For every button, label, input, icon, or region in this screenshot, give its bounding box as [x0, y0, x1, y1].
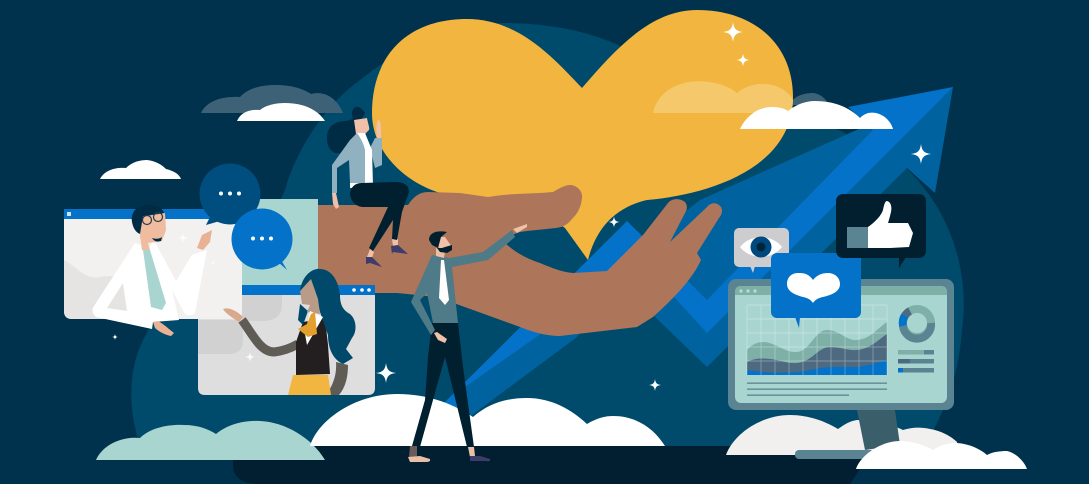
person: woman in window: [223, 269, 356, 395]
raised hand: [376, 120, 381, 138]
beard: [152, 237, 162, 242]
torso and arms: [411, 230, 515, 335]
window: front: [64, 209, 242, 319]
hair: [298, 269, 356, 364]
lower hand: [332, 193, 339, 209]
cloud: centre white: [310, 394, 665, 446]
near arm: [242, 320, 298, 352]
jacket: [296, 318, 330, 375]
person: man in window: [92, 205, 212, 336]
area chart: [747, 305, 887, 375]
sparkle stars: [112, 22, 931, 391]
cloud: right light grey: [726, 415, 960, 455]
thumbs up bubble: [836, 194, 926, 268]
beard: [437, 245, 452, 253]
legs: [350, 182, 409, 251]
window: back: [198, 285, 375, 395]
growth arrow: [440, 87, 953, 420]
cloud: top left grey: [201, 85, 343, 113]
skirt: [288, 375, 331, 395]
scarf: [298, 312, 317, 337]
speech bubble: dark: [200, 164, 260, 225]
teal panel: [238, 199, 318, 294]
face: [300, 279, 320, 314]
face: [354, 118, 369, 138]
background blob: [131, 23, 964, 446]
person: standing man: [408, 224, 527, 462]
blouse: [350, 133, 373, 188]
forearm: [370, 138, 382, 168]
shoes: [366, 257, 382, 267]
face: [438, 237, 452, 253]
hand: [318, 185, 722, 336]
heart: [372, 10, 793, 260]
cloud: top right white: [740, 101, 893, 129]
cloud: grey behind arrow: [790, 93, 829, 105]
donut chart: [903, 309, 931, 339]
hair: [429, 231, 447, 248]
cloud: bottom left teal: [96, 421, 325, 460]
heart cloud highlight: [653, 81, 793, 113]
ground band: [233, 446, 875, 484]
monitor: [728, 279, 954, 410]
progress bars: [898, 350, 934, 372]
glasses: [142, 216, 152, 224]
heart bubble: [771, 253, 861, 328]
monitor stand: [795, 410, 900, 459]
trousers: [412, 323, 474, 447]
cloud: left small white: [100, 160, 181, 179]
raised hand: [513, 224, 527, 233]
shirt: [92, 243, 207, 329]
raised hand: [197, 230, 212, 250]
cloud: top left white: [237, 103, 325, 121]
collar: [305, 311, 323, 345]
neck and face: [140, 213, 166, 250]
speech bubble: blue: [232, 208, 292, 270]
eye bubble: [734, 228, 789, 273]
ankles: [367, 239, 398, 258]
tie: [439, 260, 449, 305]
cloud: bottom right white: [856, 441, 1027, 469]
hair: [132, 205, 164, 234]
text lines: [747, 382, 887, 396]
hair: [327, 107, 365, 153]
person: sitting woman: [327, 107, 409, 267]
lower hand: [153, 321, 174, 336]
neck: [436, 248, 445, 258]
feet: [409, 446, 417, 457]
tie: [143, 250, 166, 310]
jacket: [332, 133, 365, 193]
far arm: [326, 362, 348, 395]
hand: [223, 308, 243, 322]
hip hand: [434, 332, 447, 343]
